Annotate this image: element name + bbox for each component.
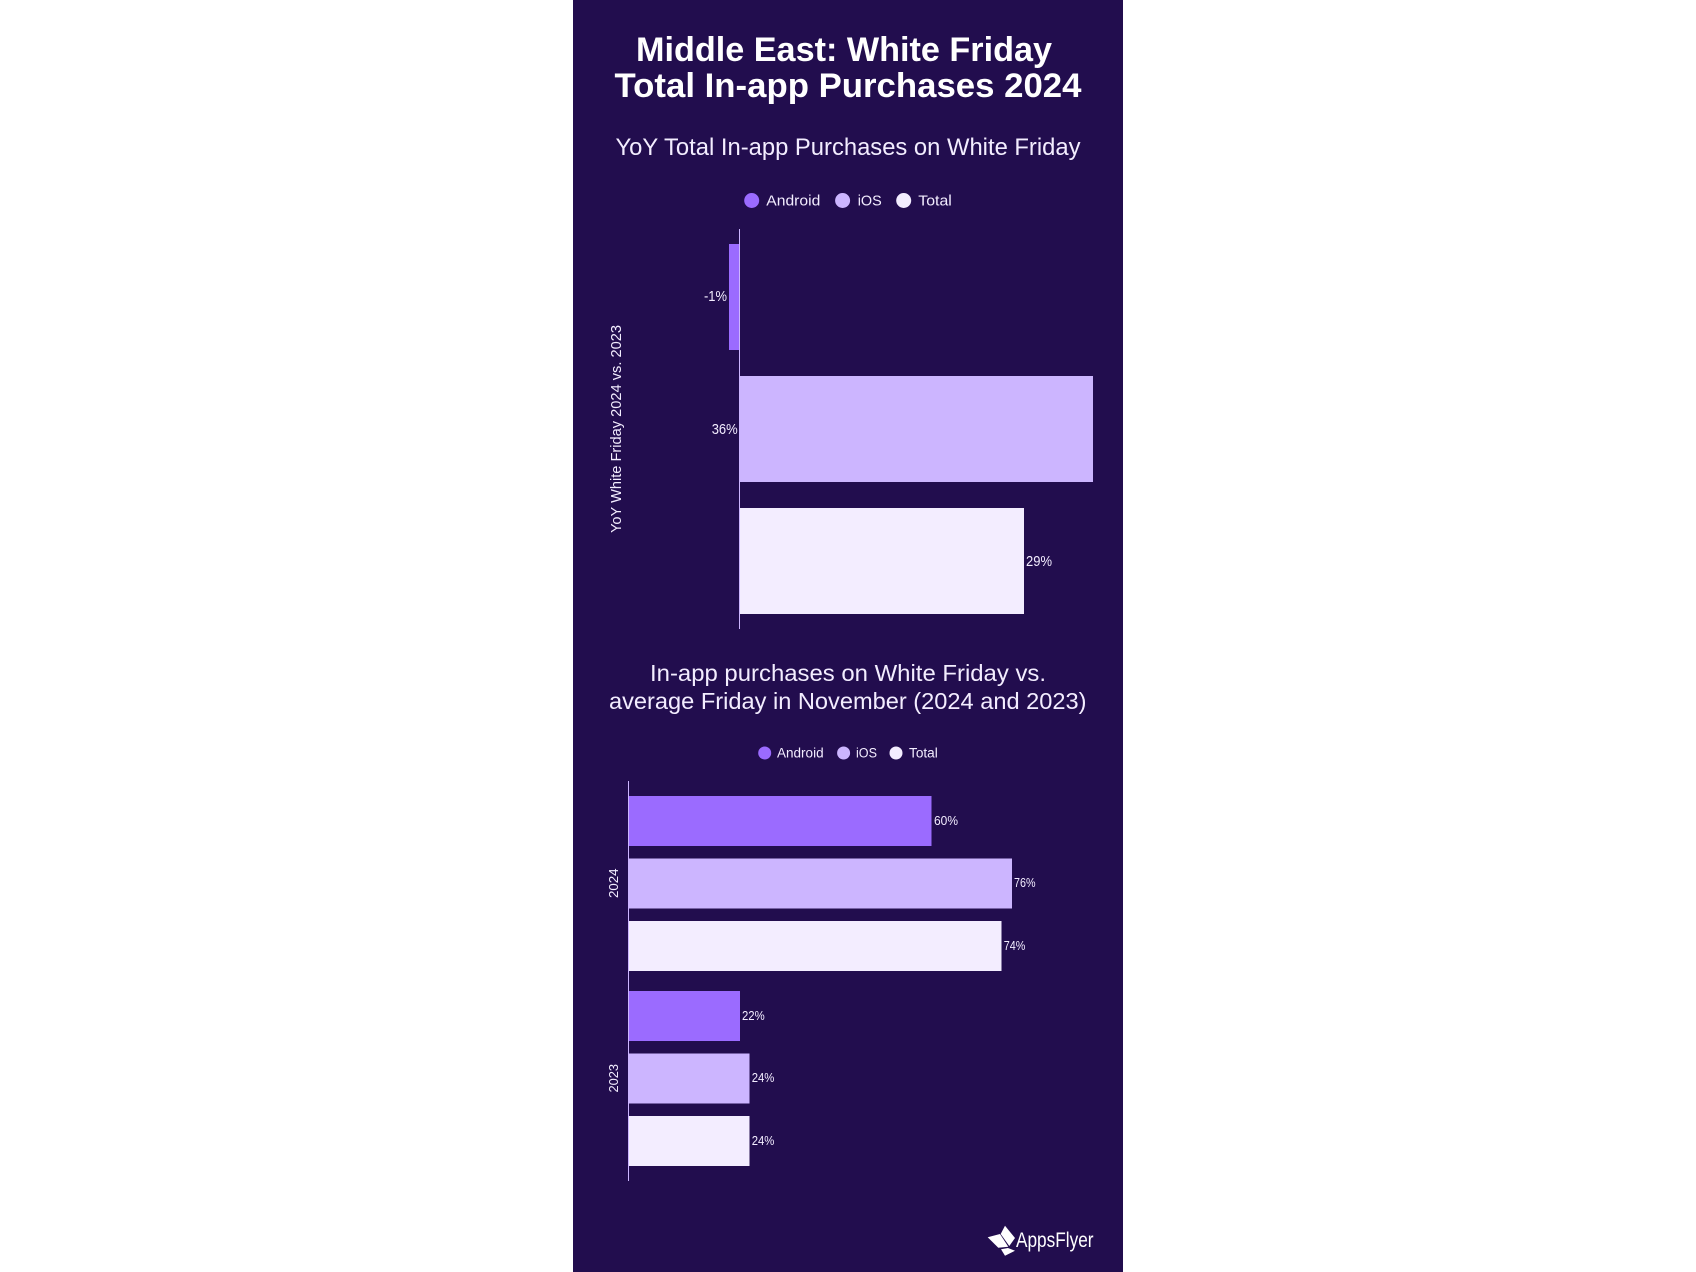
legend: comparison chart: Android bbox=[777, 746, 824, 760]
bar: 2023 iOS 24% bbox=[628, 1054, 775, 1104]
panel: dark background bbox=[573, 0, 1123, 1272]
bar: Total 29% bbox=[739, 508, 1052, 614]
legend: YoY chart: iOS bbox=[858, 192, 882, 210]
title: Middle East: White Friday bbox=[636, 31, 1052, 69]
axis label: YoY chart: YoY White Friday 2024 vs. 2023 bbox=[608, 325, 625, 533]
legend: comparison chart bbox=[758, 746, 938, 760]
legend: YoY chart: Android bbox=[766, 192, 820, 210]
title bbox=[614, 31, 1082, 105]
axis label: 2024: 2024 bbox=[606, 868, 621, 898]
logo: AppsFlyer: AppsFlyer bbox=[1016, 1229, 1094, 1252]
legend: comparison chart: Total bbox=[909, 746, 938, 760]
bar: 2023 iOS 24%: 24% bbox=[752, 1070, 775, 1085]
bar: 2023 Android 22% bbox=[628, 991, 765, 1041]
bar: Android -1%: -1% bbox=[704, 288, 727, 305]
legend: comparison chart: iOS bbox=[856, 746, 877, 760]
bar: iOS 36%: 36% bbox=[712, 421, 738, 438]
heading: White Friday vs. average Friday: In-app purchases on White Friday vs. bbox=[650, 660, 1046, 686]
title: Total In-app Purchases 2024 bbox=[614, 67, 1082, 105]
bar: iOS 36% bbox=[712, 376, 1093, 482]
heading: White Friday vs. average Friday: average Friday in November (2024 and 2023) bbox=[609, 688, 1086, 714]
bar: Total 29%: 29% bbox=[1026, 553, 1052, 570]
bar: 2024 Total 74% bbox=[628, 921, 1026, 971]
bar: 2023 Android 22%: 22% bbox=[742, 1008, 765, 1023]
bar: 2024 Android 60% bbox=[628, 796, 958, 846]
bar: 2024 Total 74%: 74% bbox=[1004, 938, 1026, 953]
bar: Android -1% bbox=[704, 244, 739, 350]
logo: AppsFlyer bbox=[988, 1226, 1094, 1256]
heading: YoY chart: YoY Total In-app Purchases on White Friday bbox=[616, 134, 1080, 161]
legend: YoY chart bbox=[744, 192, 952, 210]
bar: 2024 iOS 76%: 76% bbox=[1014, 875, 1036, 890]
heading: White Friday vs. average Friday bbox=[609, 660, 1086, 714]
bar chart: YoY bbox=[704, 229, 1093, 629]
bar: 2024 iOS 76% bbox=[628, 858, 1036, 908]
legend: YoY chart: Total bbox=[918, 192, 952, 210]
bar chart: comparison 2024 and 2023 bbox=[606, 781, 1036, 1181]
bar: 2024 Android 60%: 60% bbox=[934, 813, 958, 828]
axis label: 2023: 2023 bbox=[606, 1064, 621, 1092]
bar: 2023 Total 24%: 24% bbox=[752, 1133, 775, 1148]
bar: 2023 Total 24% bbox=[628, 1116, 775, 1166]
